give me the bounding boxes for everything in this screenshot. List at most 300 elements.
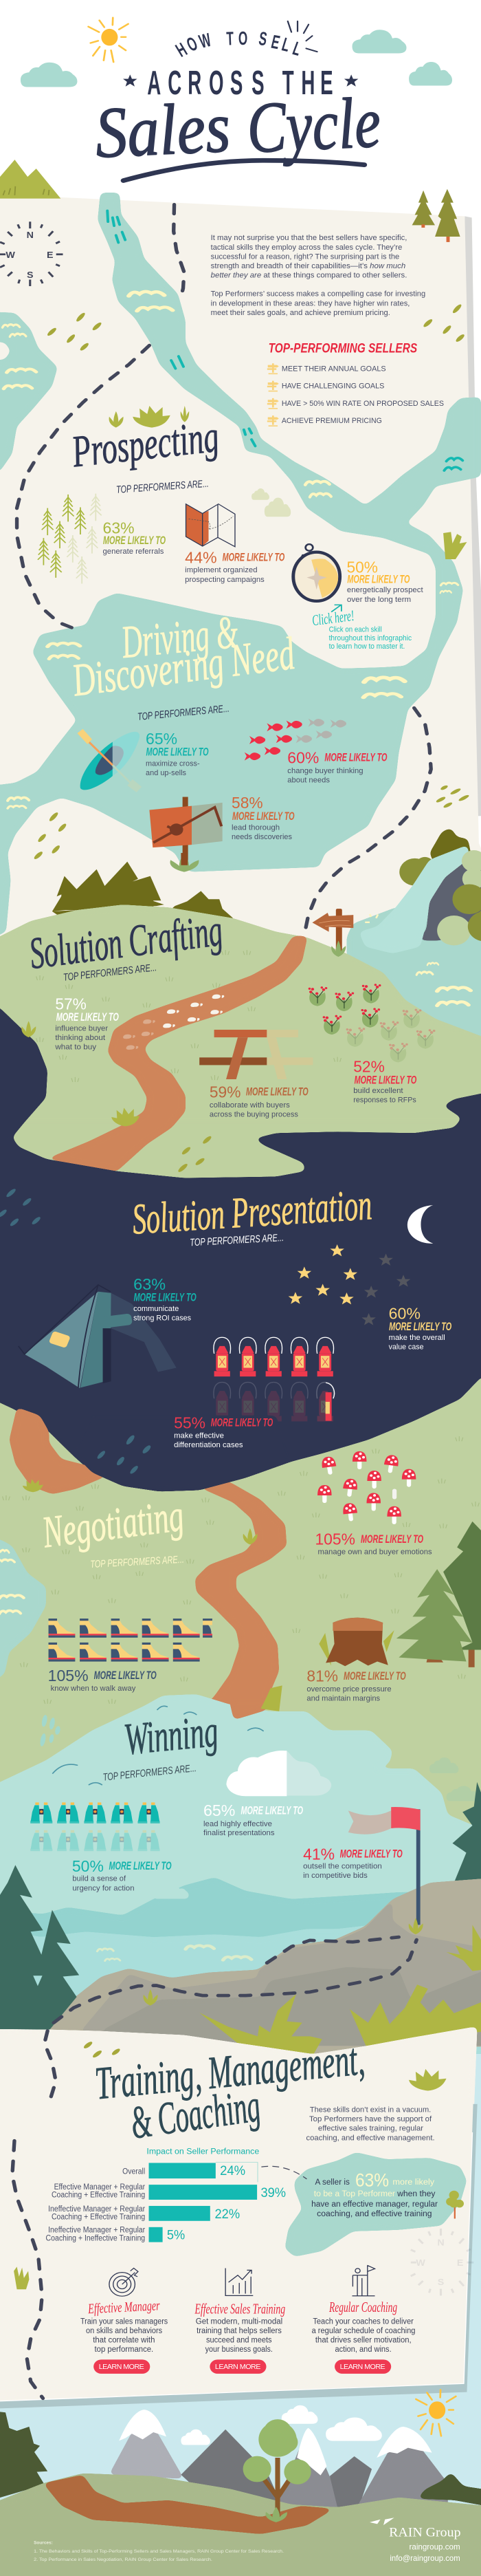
- title: Across the: E: [320, 65, 333, 102]
- paper margin band: [465, 216, 481, 816]
- column: effective manager: Train your sales managers: [80, 2317, 168, 2326]
- column: effective sales training: [194, 2301, 285, 2374]
- pale clouds: [251, 488, 291, 517]
- stat: 52 percent: build excellent: [353, 1086, 403, 1095]
- grass tuft: [443, 532, 467, 559]
- stat: 105 percent emotions: manage own and buyer emotions: [318, 1547, 432, 1556]
- title: How to Sell: [172, 28, 304, 61]
- stat: 57 percent: what to buy: [54, 1042, 97, 1051]
- title: Across the: S: [230, 65, 243, 102]
- title: Across the: H: [301, 65, 315, 102]
- title: Across the: [147, 65, 333, 102]
- title: How to Sell: L: [290, 37, 304, 60]
- callout: click here: to learn how to master it.: [329, 642, 405, 651]
- olive foreground grass: [199, 1925, 481, 2055]
- stat: 50 percent: over the long term: [347, 595, 411, 604]
- water waves pale: [98, 1945, 251, 1961]
- stat: 60 percent: make the overall: [389, 1332, 445, 1342]
- sky shape: [0, 1694, 481, 2048]
- orange path: [46, 936, 308, 1171]
- stat: 60 percent: 60%: [389, 1306, 421, 1323]
- background hill: [0, 1877, 481, 2054]
- callout: click here: throughout this infographic: [329, 633, 412, 642]
- stat text over lobe: make effective: [174, 1431, 224, 1440]
- stat: 63 percent: strong ROI cases: [133, 1313, 191, 1323]
- dashed trail lower: [20, 2031, 56, 2132]
- stat: 58 percent: lead thorough: [232, 823, 280, 832]
- column: effective manager: LEARN MORE: [99, 2363, 144, 2371]
- footprints: [123, 995, 224, 1050]
- small tree: [446, 2191, 464, 2218]
- arrow to click here: [331, 605, 342, 612]
- stat: 59 percent: collaborate with buyers: [210, 1101, 290, 1110]
- stat: 57 percent: MORE LIKELY TO: [56, 1010, 119, 1024]
- stat: 59 percent: 59%: [210, 1084, 240, 1101]
- faded compass: S: [438, 2277, 444, 2287]
- stat: 44 percent: [185, 550, 284, 584]
- icon: picnic table: [199, 1030, 313, 1079]
- stat: 58 percent: MORE LIKELY TO: [232, 810, 295, 823]
- olive dashes: [82, 2041, 121, 2059]
- section: title and introduction: [0, 18, 460, 286]
- title: How to Sell: T: [226, 28, 234, 50]
- stat: 60 percent: [389, 1306, 451, 1351]
- icon: 63 percent forest: [38, 494, 102, 584]
- stat: 52 percent: MORE LIKELY TO: [355, 1073, 416, 1086]
- faded compass: E: [457, 2258, 463, 2268]
- column: effective sales training: your business goals.: [205, 2345, 273, 2354]
- callout: click here: Click on each skill: [329, 625, 382, 634]
- stat: 105 percent walk away: know when to walk away: [51, 1684, 136, 1693]
- water: rivers and lake: [0, 193, 481, 943]
- stat: 63 percent: MORE LIKELY TO: [103, 534, 166, 547]
- bar chart: Ineffective Manager + Regular: [48, 2204, 145, 2214]
- navy lower lobe: [92, 1416, 245, 1486]
- stat: 105 percent walk away: [48, 1667, 157, 1693]
- column: effective manager: top performance.: [95, 2345, 153, 2354]
- grass fan: [23, 1479, 43, 1492]
- icon: sun: [89, 18, 128, 62]
- subheading: TOP PERFORMERS ARE...: [63, 962, 157, 984]
- stat: 81 percent: MORE LIKELY TO: [344, 1669, 406, 1682]
- navy night shape: [0, 1000, 481, 1491]
- chart title: Impact on Seller Performance: [146, 2147, 259, 2156]
- teal waves: [244, 429, 462, 470]
- stat: 41 percent: [303, 1846, 403, 1880]
- water waves: [8, 481, 458, 808]
- footer mountains: [109, 2410, 448, 2509]
- stat: 57 percent: 57%: [55, 996, 87, 1013]
- column: regular coaching: a regular schedule of coaching: [312, 2326, 416, 2335]
- footer tree: [243, 2419, 311, 2522]
- stat: 105 percent emotions: [315, 1531, 432, 1556]
- heading: driving and discovering need: Driving &: [118, 606, 241, 668]
- introduction paragraph 1: better they are at these things compared to other sellers.: [211, 270, 407, 280]
- stat: 60 percent: value case: [389, 1342, 424, 1351]
- heading: training management and coaching: & Coaching: [126, 2079, 264, 2149]
- callout: click here: [311, 607, 412, 651]
- olive bushes: [399, 857, 481, 935]
- paper shadow band: [0, 2104, 478, 2409]
- stat: 81 percent: 81%: [306, 1668, 338, 1685]
- list of seller traits: MEET THEIR ANNUAL GOALS: [282, 364, 386, 373]
- navy lobe smooth: [74, 1416, 291, 1491]
- icon: kayak: [78, 729, 142, 792]
- icon: dark pine tree: [443, 1522, 481, 1667]
- section: top-performing sellers intro text: [3, 204, 466, 628]
- stat: 63 percent: 63%: [133, 1276, 166, 1294]
- footer clouds: [181, 2405, 382, 2445]
- bar chart: [46, 2163, 286, 2242]
- text: these skills: effective sales training, regular: [318, 2123, 423, 2132]
- bar chart: 5%: [167, 2227, 185, 2242]
- stat: 50 percent: urgency for action: [72, 1883, 135, 1892]
- stat: 44 percent: implement organized: [185, 565, 258, 574]
- bar chart: 39%: [260, 2185, 286, 2200]
- title: Across the: A: [147, 65, 161, 102]
- section: waterfall scene: [0, 845, 481, 2158]
- dashed trail right: [305, 708, 431, 931]
- stat: 50 percent: MORE LIKELY TO: [347, 572, 410, 585]
- icon: boots: [49, 1619, 212, 1662]
- dashed trail left: [12, 2141, 43, 2399]
- sources: [34, 2541, 284, 2562]
- introduction paragraph 2: [211, 289, 425, 317]
- stat: 50 percent: 50%: [346, 559, 378, 576]
- icon: crescent moon: [407, 1205, 433, 1244]
- stat: 60 percent: [287, 750, 387, 784]
- stat: 60 percent: MORE LIKELY TO: [324, 750, 387, 764]
- compass rose: N: [27, 230, 34, 240]
- section: solution presentation: [19, 1276, 451, 1475]
- grass tuft: [14, 2266, 29, 2289]
- trail tip: [229, 1698, 270, 1720]
- icon: compass: [293, 544, 340, 601]
- section: prospecting: [8, 412, 471, 931]
- callout text: coaching, and effective training: [317, 2209, 432, 2218]
- column: effective sales training: LEARN MORE: [215, 2363, 261, 2371]
- stat: 44 percent: 44%: [185, 550, 217, 567]
- callout text: to be a Top Performer: [314, 2189, 395, 2198]
- title: Across the: S: [251, 65, 265, 102]
- faded compass: N: [437, 2238, 445, 2247]
- title: How to Sell: O: [183, 33, 201, 56]
- title: How to Sell: O: [238, 28, 247, 49]
- stat: 50 percent: energetically prospect: [347, 585, 423, 594]
- column: regular coaching: Regular Coaching: [328, 2299, 397, 2315]
- stat: 65 percent: MORE LIKELY TO: [240, 1804, 303, 1817]
- stat: 58 percent: needs discoveries: [232, 832, 292, 841]
- column: effective manager: that correlate with: [93, 2335, 155, 2345]
- stat: 65 percent: [146, 730, 209, 777]
- heading: winning: Winning: [122, 1707, 221, 1764]
- dark pine left: [0, 1865, 79, 2033]
- callout text: 63%: [355, 2170, 389, 2191]
- icon: half cloud: [226, 1751, 331, 1796]
- icon: school of fish: [245, 719, 346, 761]
- olive bush foreground: [452, 884, 481, 942]
- stat: 44 percent: prospecting campaigns: [185, 574, 265, 584]
- stat: 65 percent: 65%: [146, 730, 177, 748]
- section: training and footer: [0, 2099, 481, 2576]
- bar chart: Overall: [122, 2167, 145, 2176]
- dark pine right: [452, 1782, 481, 1883]
- icon: stars: [289, 1244, 410, 1325]
- section: winning: [0, 1685, 481, 2168]
- waves in lake: [416, 963, 471, 1006]
- footer sun: [416, 2390, 456, 2436]
- sources: 2. Top Performance in Sales Negotiation, RAIN Group Center for Sales Research.: [34, 2557, 212, 2562]
- stat: 65 percent: maximize cross-: [146, 759, 200, 768]
- stat: 58 percent: [232, 794, 295, 841]
- stat: 65 percent: and up-sells: [146, 768, 186, 777]
- stat: 55 percent: differentiation cases: [174, 1440, 243, 1449]
- faded compass: [411, 2229, 473, 2295]
- stat: 65 percent: finalist presentations: [203, 1828, 275, 1837]
- bar chart: 22%: [215, 2207, 240, 2222]
- introduction paragraph 2: in development in these areas: they have higher win rates,: [211, 299, 410, 307]
- column: regular coaching: LEARN MORE: [340, 2363, 385, 2371]
- column: regular coaching: action, and wins.: [335, 2345, 392, 2354]
- compass rose: W: [5, 250, 15, 260]
- stat: 59 percent: MORE LIKELY TO: [246, 1085, 309, 1098]
- footer trail: [43, 2475, 335, 2534]
- text: these skills: [306, 2105, 435, 2142]
- subheading: TOP PERFORMERS ARE...: [190, 1232, 284, 1248]
- icon: target: [109, 2268, 138, 2296]
- stat: 57 percent: influence buyer: [55, 1024, 108, 1032]
- orange trail behind night: [9, 1407, 106, 1494]
- title: How to Sell: L: [280, 33, 293, 56]
- paper white edge: [0, 2132, 473, 2401]
- contact details: raingroup.com: [410, 2542, 460, 2552]
- night dashes: [0, 1188, 42, 1227]
- column: effective manager: Effective Manager: [87, 2297, 161, 2317]
- light bushes: [437, 850, 481, 945]
- heading: driving and discovering need: Discovering Need: [68, 627, 298, 706]
- night dashes: [96, 1434, 152, 1475]
- introduction paragraph 1: It may not surprise you that the best sellers have specific,: [211, 233, 407, 242]
- grass tufts: [109, 406, 189, 428]
- bar chart: Effective Manager + Regular: [54, 2183, 145, 2191]
- mountains: [0, 160, 60, 199]
- stat: 55 percent: make effective: [174, 1431, 224, 1440]
- stat: 60 percent: 60%: [287, 750, 319, 767]
- introduction paragraph 2: meet their sales goals, and achieve premium pricing.: [211, 308, 390, 317]
- flag: [348, 1807, 423, 1934]
- sign post arrow: [312, 909, 353, 957]
- stat: 60 percent: about needs: [287, 775, 330, 784]
- stat: 60 percent: change buyer thinking: [287, 766, 363, 775]
- callout text: A seller is: [315, 2178, 350, 2187]
- foreground water band: [0, 1913, 481, 2054]
- lower paper: [0, 2026, 478, 2152]
- stat text over lobe: MORE LIKELY TO: [211, 1416, 273, 1429]
- heading: top-performing sellers: TOP-PERFORMING SELLERS: [269, 341, 417, 356]
- bar chart: 24%: [220, 2163, 245, 2178]
- list of seller traits: ACHIEVE PREMIUM PRICING: [282, 416, 382, 425]
- dashed trail summit: [267, 1937, 399, 1963]
- bar chart: Coaching + Effective Training: [52, 2212, 145, 2221]
- bar chart: Coaching + Ineffective Training: [46, 2233, 145, 2242]
- dashed connector: [261, 2166, 306, 2179]
- trees dark base: [61, 894, 153, 910]
- stat: 55 percent: [174, 1415, 273, 1449]
- bush dark: [172, 891, 233, 918]
- stat: 52 percent: [353, 1059, 416, 1104]
- list of seller traits: [267, 363, 444, 426]
- heading: negotiating: Negotiating: [38, 1491, 187, 1557]
- heading: solution crafting: Solution Crafting: [26, 906, 226, 979]
- stat: 44 percent: MORE LIKELY TO: [223, 551, 284, 563]
- stat: 50 percent: MORE LIKELY TO: [109, 1859, 172, 1872]
- subheading: TOP PERFORMERS ARE...: [102, 1762, 197, 1783]
- green hill base: [0, 905, 481, 2158]
- icon: folded map: [186, 504, 235, 547]
- pale blue edge: [454, 2005, 481, 2168]
- stat: 65 percent: MORE LIKELY TO: [146, 745, 209, 758]
- stat: 81 percent: [306, 1668, 406, 1702]
- logo: RAIN Group: [370, 2518, 461, 2540]
- dark bush: [429, 827, 471, 867]
- stat: 63 percent: generate referrals: [103, 547, 164, 556]
- section: training heading: [92, 2033, 447, 2149]
- introduction paragraph 2: Top Performers’ success makes a compelling case for investing: [211, 289, 425, 298]
- grass ticks: [3, 1436, 479, 1704]
- callout: click here: Click here!: [311, 607, 355, 629]
- stat: 55 percent: MORE LIKELY TO: [211, 1416, 273, 1429]
- title: How to Sell: H: [172, 39, 190, 61]
- compass rose: [0, 221, 63, 286]
- subheading: TOP PERFORMERS ARE...: [90, 1554, 184, 1570]
- icon: title sparkle lines: [288, 21, 317, 52]
- footer pine: [0, 2412, 47, 2503]
- sky: [0, 2104, 481, 2576]
- heading: training management and coaching: [92, 2033, 367, 2149]
- subheading: TOP PERFORMERS ARE...: [137, 703, 230, 723]
- heading: driving and discovering need: [68, 606, 298, 706]
- column: regular coaching: Teach your coaches to deliver: [313, 2317, 414, 2326]
- stat text over lobe: differentiation cases: [174, 1440, 243, 1449]
- birds: [53, 1706, 263, 1785]
- grass tuft: [243, 1528, 258, 1545]
- title: How to Sell: E: [269, 31, 282, 53]
- column: effective sales training: succeed and meets: [206, 2335, 272, 2345]
- stat text over lobe: 55%: [174, 1415, 205, 1432]
- stat: 65 percent: 65%: [203, 1802, 235, 1820]
- sources: Sources:: [34, 2541, 53, 2545]
- stat: 41 percent: in competitive bids: [303, 1871, 368, 1880]
- stat: 57 percent: [54, 996, 119, 1051]
- dashed trail on rocks: [54, 1940, 416, 2023]
- river marks: [107, 210, 183, 369]
- stat: 50 percent: 50%: [72, 1858, 104, 1875]
- waterfall splash: [365, 914, 378, 922]
- olive dashes right: [423, 303, 466, 343]
- compass rose: E: [47, 250, 54, 260]
- column: regular coaching: that drives seller motivation,: [315, 2335, 412, 2345]
- icon: mushrooms: [317, 1451, 416, 1524]
- water: left bay: [0, 312, 58, 473]
- faded compass: W: [416, 2258, 425, 2268]
- stat: 105 percent emotions: 105%: [315, 1531, 355, 1548]
- post base: [181, 853, 188, 865]
- stat: 63 percent: [103, 520, 166, 556]
- yellow water waves: [3, 292, 172, 389]
- stat: 65 percent: lead highly effective: [203, 1819, 272, 1828]
- stat: 59 percent: [210, 1084, 309, 1118]
- dashed trail top: [174, 204, 184, 299]
- column: effective manager: [80, 2297, 168, 2374]
- introduction paragraph 1: successful for a reason, right? The surprising part is the: [211, 252, 399, 261]
- left lake: [0, 1538, 46, 1690]
- icon: left star: [123, 74, 137, 87]
- text: these skills: coaching, and effective management.: [306, 2133, 435, 2142]
- introduction paragraph 1: tactical skills they employ across the sales cycle. They’re: [211, 243, 402, 252]
- stat: 50 percent: [346, 559, 423, 604]
- compass rose: S: [27, 270, 34, 280]
- list of seller traits: HAVE > 50% WIN RATE ON PROPOSED SALES: [282, 399, 444, 408]
- contact details: info@raingroup.com: [390, 2553, 460, 2563]
- title: Sales Cycle: Sales: [93, 87, 232, 173]
- footer land: [0, 2474, 481, 2576]
- stat: 81 percent: and maintain margins: [306, 1693, 380, 1702]
- stat text over lobe: [174, 1415, 273, 1449]
- map paper background: [0, 194, 481, 1088]
- grass tuft: [21, 1021, 36, 1037]
- column: effective sales training: Get modern, multi-modal: [196, 2317, 282, 2326]
- icon: tree stump: [319, 1618, 394, 1666]
- olive dashes: [177, 1135, 212, 1173]
- text: these skills: These skills don’t exist in a vacuum.: [310, 2105, 431, 2114]
- stat: 57 percent: thinking about: [55, 1033, 106, 1042]
- icon: flowers: [309, 984, 435, 1062]
- icon: fishing sign: [149, 797, 223, 870]
- sign grass: [170, 854, 199, 872]
- column: effective sales training: training that helps sellers: [197, 2326, 282, 2335]
- hill overlay: [0, 905, 481, 1125]
- pine trees: [412, 189, 460, 242]
- waterfall: [359, 845, 469, 953]
- icon: binoculars: [30, 1802, 160, 1851]
- icon: growth chart: [225, 2268, 253, 2295]
- logo: RAIN Group: RAIN Group: [389, 2525, 461, 2540]
- stat: 41 percent: 41%: [303, 1846, 335, 1863]
- title: Sales Cycle: Cycle: [245, 83, 383, 169]
- introduction paragraph 1: strength and breadth of their capabilities—it’s how much: [211, 261, 405, 270]
- stat: 65 percent: [203, 1802, 303, 1837]
- heading: prospecting: Prospecting: [69, 412, 222, 477]
- text: these skills: Top Performers have the support of: [309, 2114, 432, 2123]
- title: Across the: O: [209, 65, 224, 102]
- stat: 63 percent: [133, 1276, 197, 1323]
- olive dashes: [33, 784, 470, 861]
- stat: 55 percent: 55%: [174, 1415, 205, 1432]
- bar chart: Coaching + Effective Training: [52, 2190, 145, 2199]
- icon: light pine tree: [396, 1569, 473, 1663]
- stat: 58 percent: 58%: [232, 794, 263, 812]
- title: Sales Cycle: [93, 83, 383, 173]
- subheading: TOP PERFORMERS ARE...: [116, 478, 209, 496]
- icon: lanterns lit: [214, 1337, 334, 1376]
- stat: 52 percent: 52%: [353, 1059, 385, 1076]
- contact details: [390, 2542, 460, 2563]
- column: effective sales training: Effective Sales Training: [194, 2301, 285, 2317]
- callout text: more likely: [392, 2178, 435, 2187]
- clouds: [21, 30, 452, 87]
- grass fan: [111, 1108, 139, 1126]
- dashed trail to prospecting: [17, 345, 149, 628]
